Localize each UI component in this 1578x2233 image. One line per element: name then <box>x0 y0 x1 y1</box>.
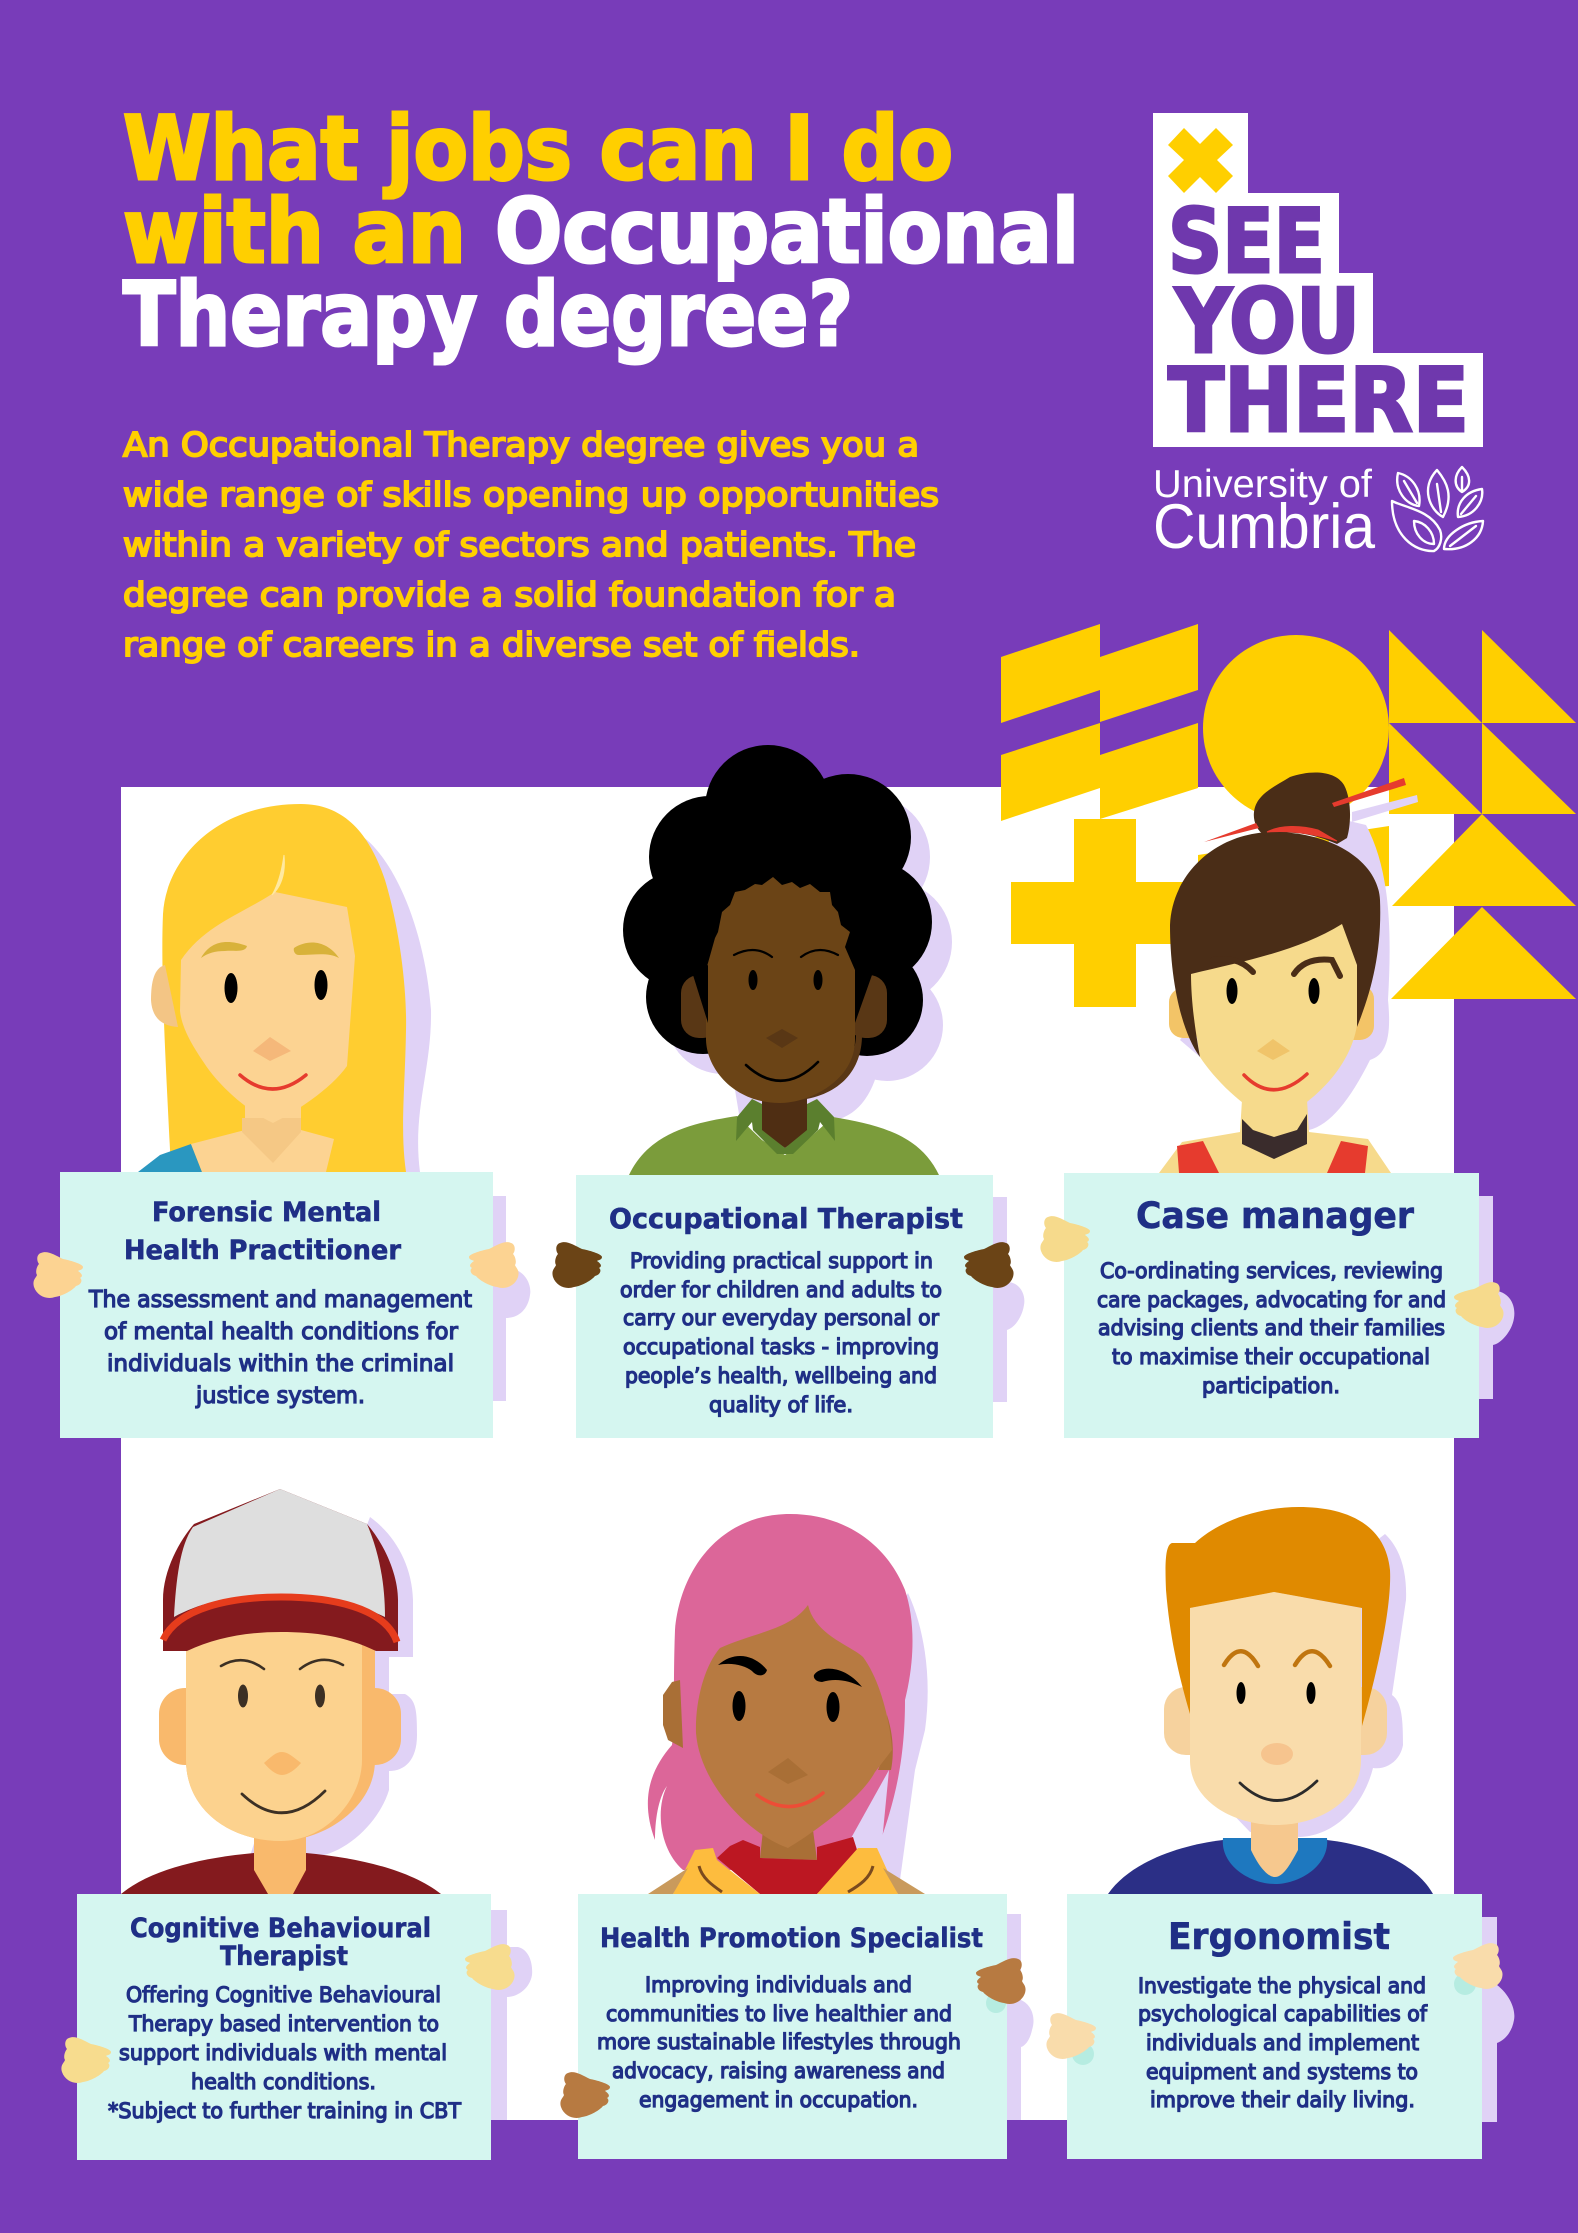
card background <box>1067 1894 1482 2159</box>
neck and chest <box>191 1100 334 1172</box>
card shadow <box>1000 1914 1034 2120</box>
bun <box>1254 772 1350 844</box>
card description: Improving individuals and <box>645 1973 912 1998</box>
card description <box>88 1285 472 1409</box>
card description: communities to live healthier and <box>606 2002 952 2027</box>
face <box>780 1035 862 1103</box>
card heading: Case manager <box>1136 1194 1414 1237</box>
University of Cumbria wordmark: University of <box>1153 463 1372 506</box>
card: Case manager <box>1040 1173 1514 1438</box>
card description <box>1097 1259 1446 1399</box>
person: forensic practitioner with blonde hair <box>138 804 431 1172</box>
cap <box>163 1489 398 1651</box>
ears <box>663 1680 683 1748</box>
shadow <box>250 1517 417 1856</box>
person: case manager with hair bun <box>1159 772 1418 1173</box>
card heading: Health Practitioner <box>124 1235 401 1266</box>
card description: individuals and implement <box>1146 2031 1419 2056</box>
card background <box>578 1894 1007 2159</box>
right ear <box>878 1715 893 1770</box>
card shadow <box>1470 1196 1514 1399</box>
logo: See You There <box>1153 113 1483 452</box>
neck <box>254 1830 306 1894</box>
intro paragraph: within a variety of sectors and patients. The <box>123 525 916 564</box>
hair <box>648 1514 912 1870</box>
title: Therapy degree? <box>123 263 853 366</box>
card description: occupational tasks - improving <box>623 1335 939 1360</box>
intro paragraph: range of careers in a diverse set of fields. <box>123 625 860 664</box>
features <box>1213 959 1340 1090</box>
face <box>696 1605 892 1848</box>
shadow <box>1180 820 1390 1130</box>
title: What jobs can I do <box>123 97 953 200</box>
intro paragraph: An Occupational Therapy degree gives you a <box>123 425 919 464</box>
ears <box>1164 1687 1214 1755</box>
neck <box>1251 1815 1298 1877</box>
logo wordmark <box>1168 190 1469 452</box>
card background <box>77 1894 491 2160</box>
card description: to maximise their occupational <box>1112 1345 1430 1370</box>
jacket creases <box>699 1866 873 1892</box>
face <box>180 892 355 1123</box>
right hand shadow <box>1454 1973 1476 1995</box>
title: Occupational <box>495 180 1079 283</box>
card heading: Occupational Therapist <box>609 1202 963 1235</box>
card: Health Promotion Specialist <box>560 1894 1034 2159</box>
ear <box>151 965 178 1027</box>
features <box>221 1660 343 1813</box>
card: Ergonomist <box>1046 1894 1514 2159</box>
hair stick <box>1204 778 1406 842</box>
card description: carry our everyday personal or <box>623 1306 939 1331</box>
card description <box>597 1973 961 2113</box>
jacket <box>673 1848 898 1894</box>
card: Forensic Mental Health Practitioner <box>33 1172 530 1438</box>
card heading <box>130 1913 431 1972</box>
card heading: Cognitive Behavioural <box>130 1913 431 1944</box>
card shadow <box>480 1196 530 1401</box>
shadow <box>1200 1534 1406 1837</box>
right hand <box>1453 1943 1503 1989</box>
card description: Offering Cognitive Behavioural <box>126 1983 441 2008</box>
card heading: Health Promotion Specialist <box>600 1923 983 1954</box>
person: health promotion specialist with pink hair <box>648 1514 928 1894</box>
card shadow <box>1470 1917 1514 2122</box>
card description: equipment and systems to <box>1146 2060 1418 2085</box>
card description: of mental health conditions for <box>104 1317 458 1345</box>
icon: yellow cross <box>1168 128 1233 193</box>
features <box>201 942 339 1089</box>
card description: engagement in occupation. <box>639 2088 918 2113</box>
card description: more sustainable lifestyles through <box>597 2030 961 2055</box>
shirt <box>1108 1840 1433 1894</box>
afro hair <box>623 745 932 1056</box>
hair <box>1166 1507 1390 1726</box>
card background <box>1064 1173 1479 1438</box>
left hand <box>560 2072 610 2118</box>
card background <box>576 1175 993 1438</box>
face <box>1191 915 1357 1122</box>
card: Occupational Therapist <box>552 1175 1024 1438</box>
card description: The assessment and management <box>88 1285 472 1313</box>
title <box>123 97 1079 366</box>
card heading: Therapist <box>220 1941 348 1972</box>
right hand <box>1454 1282 1504 1328</box>
card description: psychological capabilities of <box>1138 2002 1427 2027</box>
card: Cognitive Behavioural Therapist <box>61 1894 532 2160</box>
card description: improve their daily living. <box>1150 2088 1415 2113</box>
choker <box>1242 1114 1307 1159</box>
intro paragraph <box>123 425 939 664</box>
left hand <box>33 1252 83 1298</box>
card heading <box>124 1197 401 1266</box>
left hand <box>552 1242 602 1288</box>
ears <box>159 1688 219 1765</box>
card shadow <box>985 1197 1024 1402</box>
card description: advising clients and their families <box>1098 1316 1445 1341</box>
collar <box>736 1099 835 1154</box>
logo wordmark: YOU <box>1174 270 1360 373</box>
face <box>1190 1592 1361 1825</box>
card description: order for children and adults to <box>620 1278 942 1303</box>
logo wordmark: THERE <box>1168 349 1469 452</box>
collar <box>1223 1838 1327 1884</box>
shadow <box>362 836 431 1172</box>
features <box>718 1656 862 1807</box>
decorative yellow geometric shapes <box>1001 624 1576 1007</box>
card heading: Ergonomist <box>1168 1915 1390 1958</box>
left hand <box>61 2037 111 2083</box>
card description: advocacy, raising awareness and <box>612 2059 945 2084</box>
person: cognitive behavioural therapist with cap <box>121 1489 441 1894</box>
white content panel <box>121 787 1454 2120</box>
card description: support individuals with mental <box>119 2041 447 2066</box>
shirt <box>138 1144 202 1172</box>
hair highlight <box>272 855 284 895</box>
gap between hair strands <box>850 1770 889 1880</box>
neck <box>760 1830 817 1860</box>
right hand <box>469 1242 519 1288</box>
shirt <box>629 1116 939 1175</box>
right hand <box>964 1242 1014 1288</box>
card description <box>620 1249 942 1418</box>
intro paragraph: degree can provide a solid foundation for a <box>123 575 896 614</box>
card description: quality of life. <box>709 1393 853 1418</box>
left hand <box>1046 2013 1096 2059</box>
neck <box>762 1095 807 1148</box>
hair <box>162 804 406 1172</box>
hair band <box>1267 826 1337 841</box>
shadow <box>666 795 952 1120</box>
straps <box>1177 1141 1368 1173</box>
card heading: Forensic Mental <box>152 1197 381 1228</box>
hand shadow <box>986 1993 1006 2013</box>
card background <box>60 1172 493 1438</box>
card description: Co-ordinating services, reviewing <box>1100 1259 1443 1284</box>
card description: Providing practical support in <box>630 1249 933 1274</box>
card description <box>1138 1974 1427 2113</box>
shirt <box>121 1853 441 1894</box>
left hand <box>1040 1216 1090 1262</box>
ears <box>1169 988 1205 1038</box>
right hand <box>465 1944 515 1990</box>
card description: participation. <box>1202 1374 1340 1399</box>
person: ergonomist with orange hair <box>1108 1507 1433 1894</box>
right hand <box>976 1958 1026 2004</box>
features <box>734 950 838 1081</box>
University of Cumbria wordmark: Cumbria <box>1153 492 1376 562</box>
card description: health conditions. <box>191 2070 376 2095</box>
card description: individuals within the criminal <box>107 1349 454 1377</box>
person: occupational therapist with afro <box>623 745 952 1175</box>
head <box>186 1630 375 1841</box>
card description: Investigate the physical and <box>1138 1974 1426 1999</box>
features <box>1224 1651 1330 1801</box>
left hand shadow <box>1072 2043 1094 2065</box>
card description: care packages, advocating for and <box>1097 1288 1446 1313</box>
logo stepped white block <box>1153 113 1483 447</box>
University of Cumbria wordmark <box>1153 463 1376 562</box>
card description: Therapy based intervention to <box>128 2012 439 2037</box>
card description <box>108 1983 462 2124</box>
hair <box>1170 832 1380 1057</box>
card description: justice system. <box>195 1381 365 1409</box>
scarf <box>717 1837 858 1894</box>
card shadow <box>480 1910 532 2120</box>
icon: Cumbria leaves <box>1392 467 1483 551</box>
logo wordmark: SEE <box>1168 190 1325 293</box>
card description: *Subject to further training in CBT <box>108 2099 462 2124</box>
title: with an <box>123 180 466 283</box>
intro paragraph: wide range of skills opening up opportunities <box>123 475 939 514</box>
sideburns <box>693 965 708 1023</box>
shadow <box>840 1593 928 1880</box>
card description: people’s health, wellbeing and <box>625 1364 937 1389</box>
ears <box>681 975 721 1038</box>
shadow of hair stick <box>1352 795 1418 822</box>
neck and shoulders <box>1159 1100 1391 1173</box>
